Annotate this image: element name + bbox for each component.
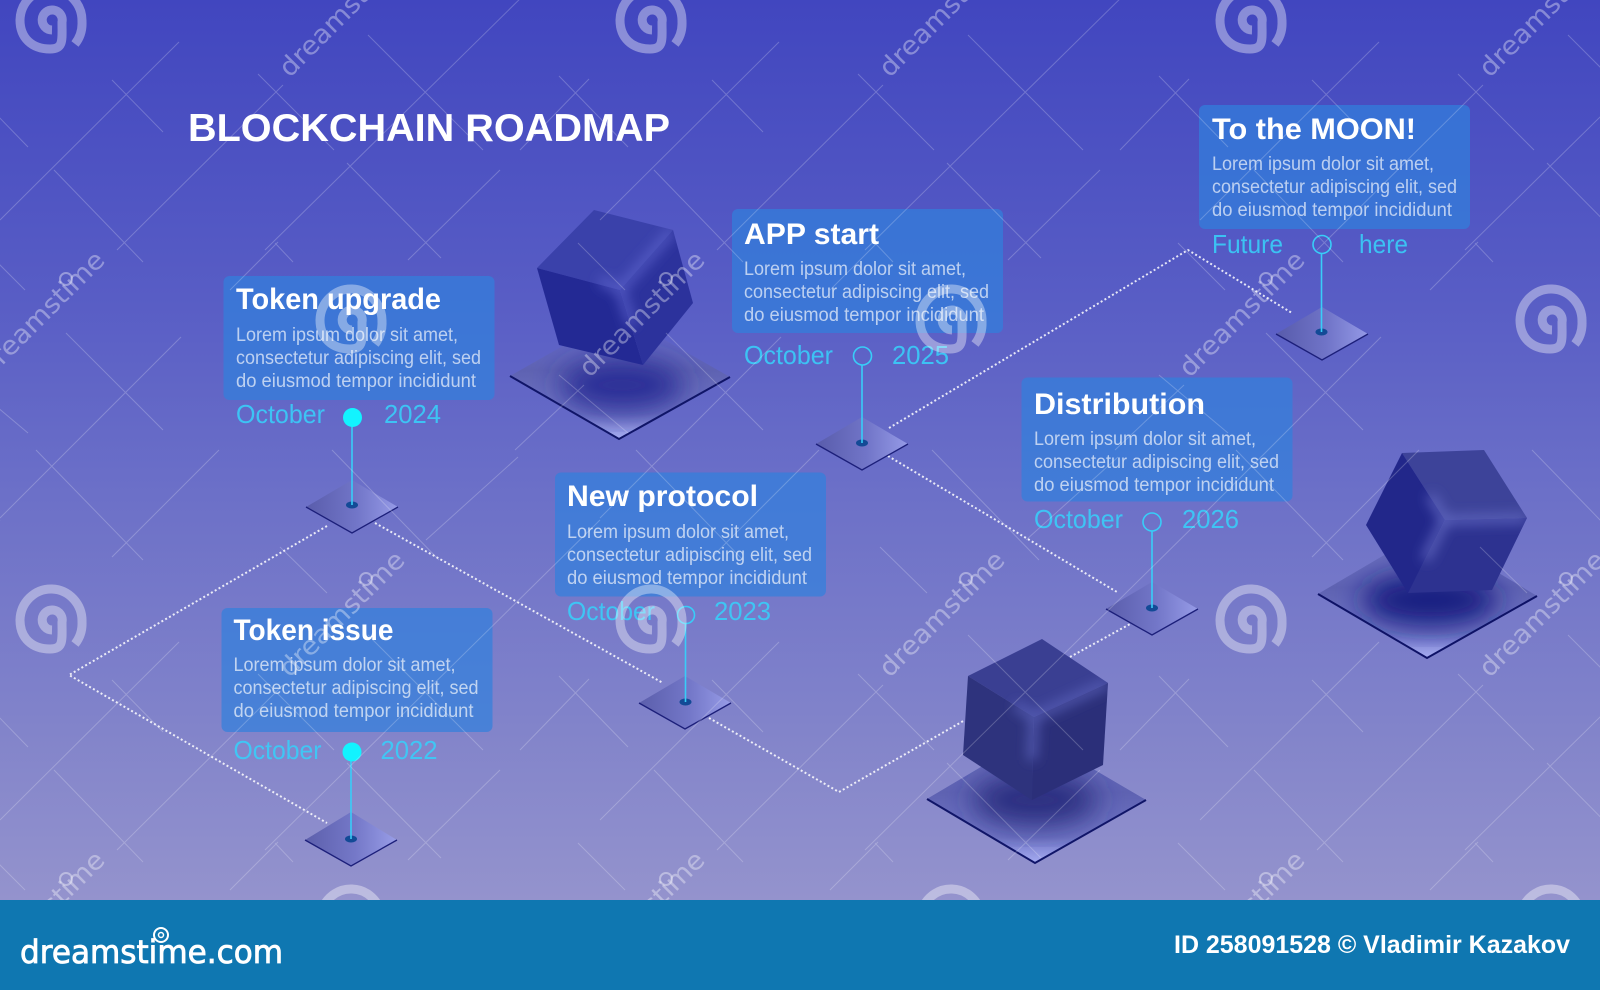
watermarks: dreamstime xyxy=(1173,845,1311,983)
heading: Distribution xyxy=(1034,388,1205,421)
panel xyxy=(1022,378,1292,502)
pad xyxy=(306,480,398,533)
body text xyxy=(1034,429,1279,496)
heading: To the MOON! xyxy=(1212,113,1416,146)
stage: Token upgrade, October 2024 xyxy=(224,276,494,533)
date: here xyxy=(1359,229,1408,259)
stage: Token issue, October 2022 xyxy=(222,608,492,866)
watermarks: dreamstime xyxy=(573,845,711,983)
title: BLOCKCHAIN ROADMAP xyxy=(188,107,670,150)
footer bar xyxy=(0,900,1600,990)
body text: Lorem ipsum dolor sit amet, xyxy=(1212,154,1434,175)
platform: cube one base xyxy=(510,344,730,440)
pin xyxy=(678,606,694,702)
stage: APP start, October 2025 xyxy=(732,209,1003,470)
heading: Token upgrade xyxy=(236,283,441,316)
date: October xyxy=(234,735,322,765)
pad xyxy=(816,417,908,470)
body text: do eiusmod tempor incididunt xyxy=(236,371,477,392)
body text: consectetur adipiscing elit, sed xyxy=(1034,452,1279,473)
pad xyxy=(1276,307,1368,360)
date: October xyxy=(1034,504,1123,534)
body text xyxy=(236,325,481,392)
body text xyxy=(1212,154,1457,221)
dotted roadmap path xyxy=(69,250,1292,823)
date: October xyxy=(236,399,325,429)
body text: Lorem ipsum dolor sit amet, xyxy=(234,655,456,676)
date xyxy=(1034,504,1239,534)
panel xyxy=(555,472,826,596)
body text: do eiusmod tempor incididunt xyxy=(1034,475,1275,496)
cube two xyxy=(963,639,1108,800)
panel xyxy=(1199,105,1470,229)
body text: do eiusmod tempor incididunt xyxy=(1212,200,1453,221)
panel xyxy=(224,276,494,400)
pin xyxy=(342,742,362,839)
date: 2022 xyxy=(380,735,438,765)
date xyxy=(744,340,949,370)
heading: New protocol xyxy=(567,480,758,513)
date: 2025 xyxy=(892,340,949,370)
panel xyxy=(222,608,492,732)
stage: New protocol, October 2023 xyxy=(555,472,826,729)
pad xyxy=(305,812,397,866)
image credit: ID 258091528 © Vladimir Kazakov xyxy=(1174,931,1570,959)
date: October xyxy=(567,596,655,626)
date xyxy=(236,399,441,429)
platform: cube two base xyxy=(926,764,1146,864)
pad xyxy=(1106,582,1198,635)
cube one xyxy=(537,210,693,365)
watermarks: dreamstime xyxy=(573,245,711,383)
pin xyxy=(343,408,362,505)
body text: do eiusmod tempor incididunt xyxy=(567,568,808,589)
watermarks: dreamstime xyxy=(273,545,411,683)
logo: dreamstime.com xyxy=(20,933,283,971)
date xyxy=(1212,229,1408,259)
stage: Distribution, October 2026 xyxy=(1022,378,1292,635)
pin xyxy=(1313,236,1331,332)
cube three xyxy=(1366,450,1527,593)
body text: do eiusmod tempor incididunt xyxy=(234,701,474,722)
heading: Token issue xyxy=(234,614,394,647)
platform: cube three base xyxy=(1318,555,1538,659)
body text: Lorem ipsum dolor sit amet, xyxy=(236,325,458,346)
body text: Lorem ipsum dolor sit amet, xyxy=(567,522,789,543)
body text: Lorem ipsum dolor sit amet, xyxy=(1034,429,1256,450)
body text xyxy=(567,522,812,589)
watermarks: dreamstime xyxy=(1173,245,1311,383)
body text: consectetur adipiscing elit, sed xyxy=(567,545,812,566)
watermarks: dreamstime xyxy=(873,545,1011,683)
body text: consectetur adipiscing elit, sed xyxy=(236,348,481,369)
panel xyxy=(732,209,1003,333)
date: 2026 xyxy=(1182,504,1239,534)
date: 2023 xyxy=(714,596,771,626)
date: October xyxy=(744,340,833,370)
body text xyxy=(744,259,989,326)
pad xyxy=(639,676,731,729)
body text: do eiusmod tempor incididunt xyxy=(744,305,985,326)
body text: consectetur adipiscing elit, sed xyxy=(1212,177,1457,198)
body text: consectetur adipiscing elit, sed xyxy=(234,678,478,699)
body text xyxy=(234,655,478,722)
date: 2024 xyxy=(384,399,441,429)
body text: consectetur adipiscing elit, sed xyxy=(744,282,989,303)
date: Future xyxy=(1212,229,1283,259)
pin xyxy=(1143,513,1161,608)
date xyxy=(567,596,771,626)
stage: To the MOON, Future here xyxy=(1199,105,1470,360)
date xyxy=(234,735,438,765)
pin xyxy=(854,347,872,443)
body text: Lorem ipsum dolor sit amet, xyxy=(744,259,966,280)
heading: APP start xyxy=(744,218,879,251)
